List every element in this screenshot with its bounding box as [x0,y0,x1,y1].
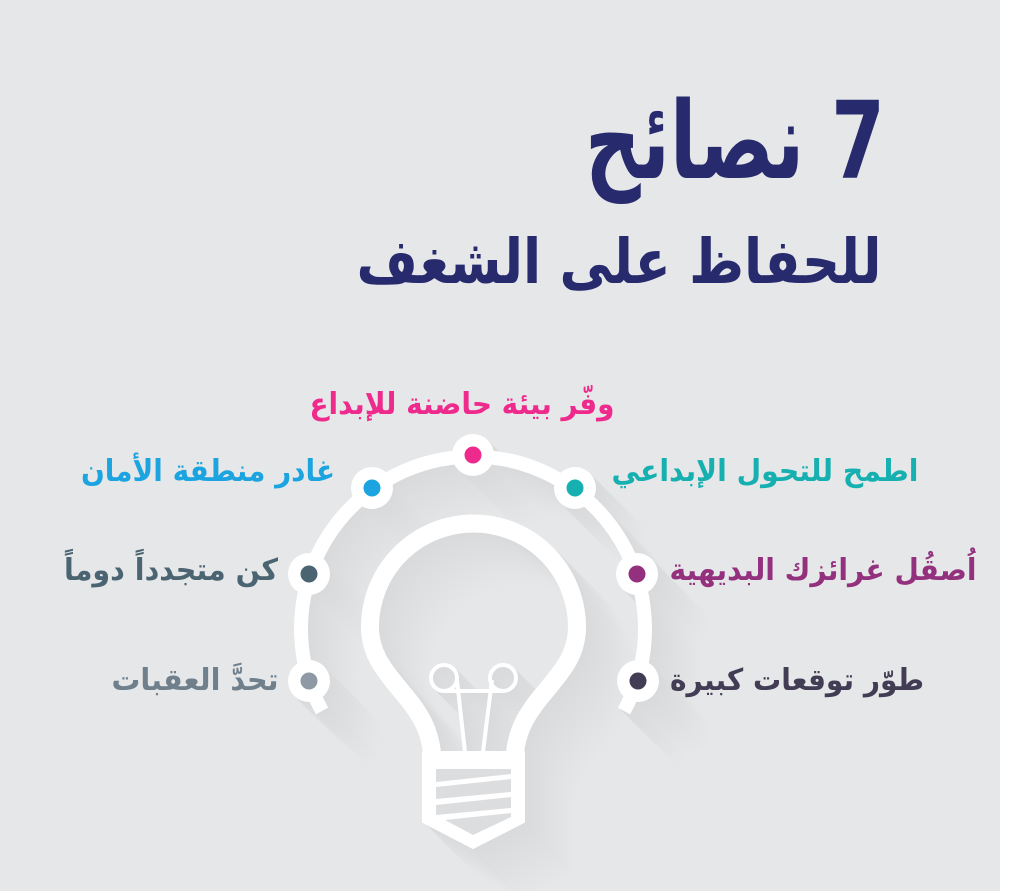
node: grey [288,660,330,702]
label: pink: وفّر بيئة حاضنة للإبداع [310,385,614,422]
node: blue [351,467,393,509]
node: slate [288,553,330,595]
long shadow of bulb and arc [290,436,709,891]
label: purple: اُصقُل غرائزك البديهية [670,546,976,588]
title: 7 نصائح [585,80,885,204]
label: blue: غادر منطقة الأمان [81,452,335,489]
label: grey: تحدَّ العقبات [112,662,278,698]
label: dark: طوّر توقعات كبيرة [670,663,924,698]
node: teal [554,467,596,509]
label: slate: كن متجدداً دوماً [64,548,279,588]
arc with nodes [288,434,659,711]
label: teal: اطمح للتحول الإبداعي [612,454,918,489]
node: purple [616,553,658,595]
node: pink [452,434,494,476]
subtitle: للحفاظ على الشغف [356,225,882,298]
node: dark [617,660,659,702]
icon: light bulb [370,524,577,848]
